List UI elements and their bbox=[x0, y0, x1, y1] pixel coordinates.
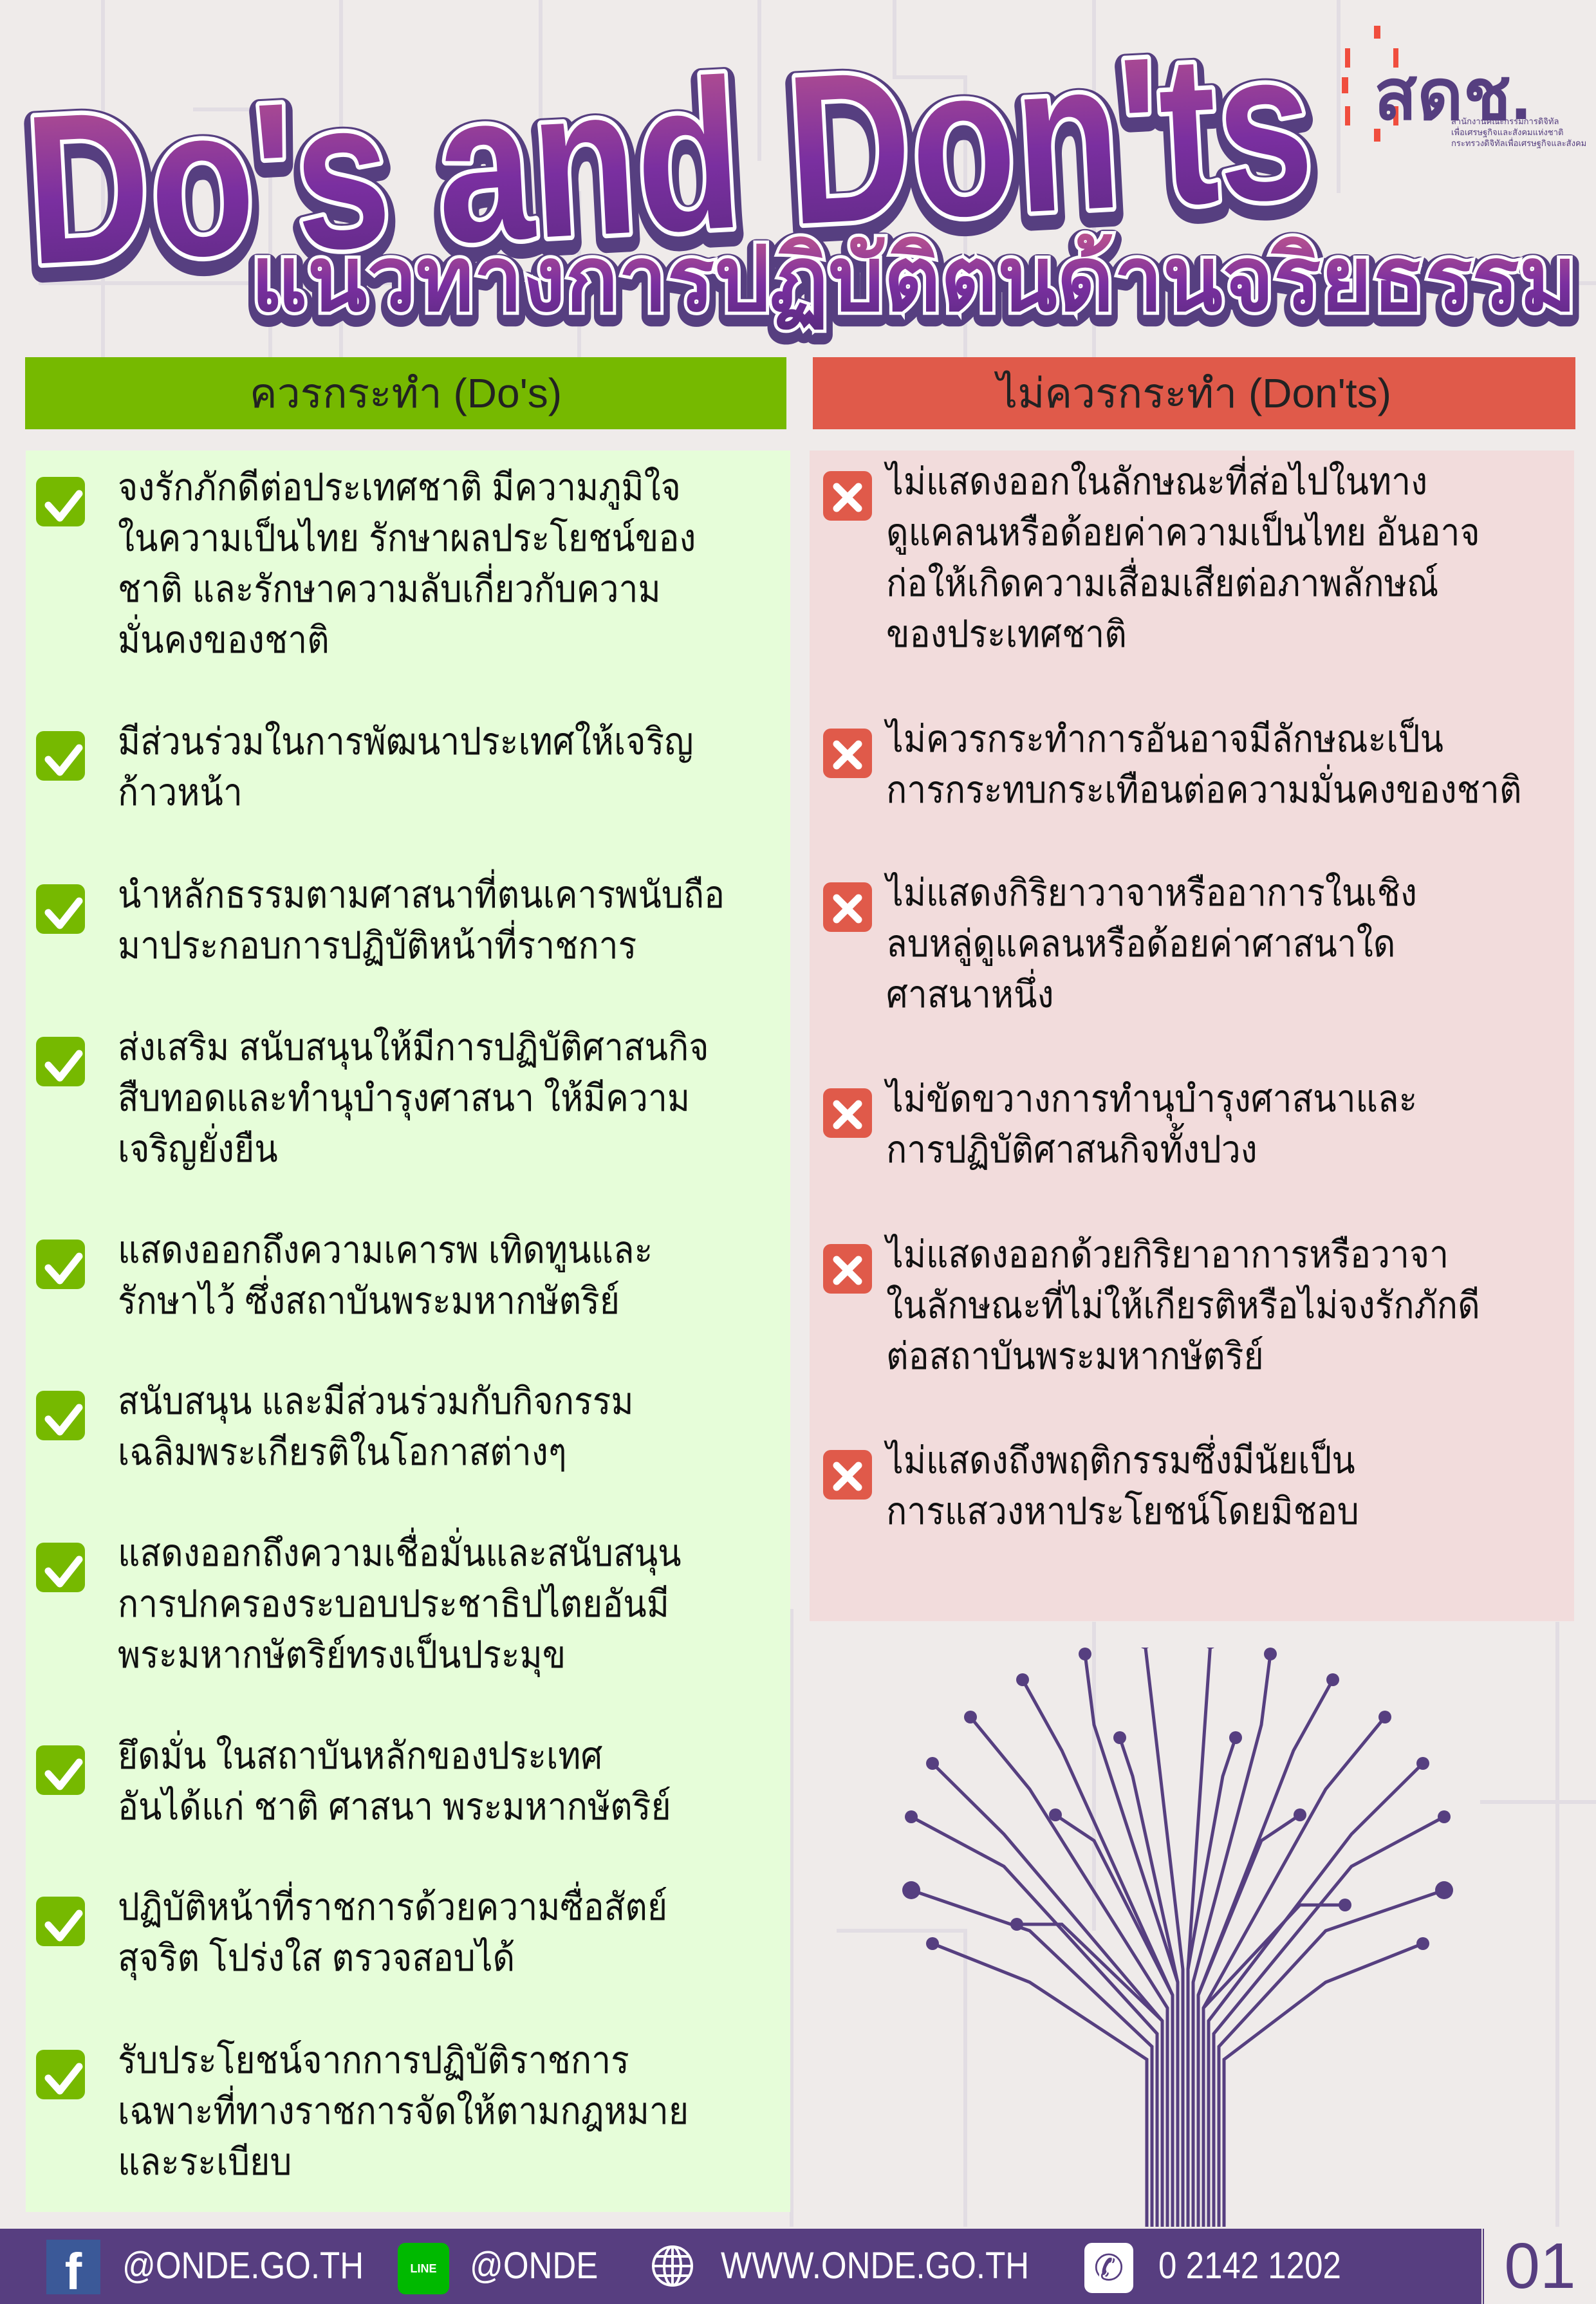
do item 5 bbox=[36, 1229, 653, 1322]
do item 6: เฉลิมพระเกียรติในโอกาสต่างๆ bbox=[118, 1431, 566, 1473]
do item 7: พระมหากษัตริย์ทรงเป็นประมุข bbox=[118, 1634, 566, 1676]
do item 10: รับประโยชน์จากการปฏิบัติราชการ bbox=[118, 2039, 629, 2081]
do item 4: เจริญยั่งยืน bbox=[118, 1128, 278, 1170]
do item 1: จงรักภักดีต่อประเทศชาติ มีความภูมิใจ bbox=[118, 467, 681, 508]
page number bbox=[1480, 2229, 1596, 2304]
dont item 6 bbox=[823, 1435, 1359, 1532]
header: don'ts: ไม่ควรกระทำ (Don'ts) bbox=[997, 370, 1391, 416]
do item 3: นำหลักธรรมตามศาสนาที่ตนเคารพนับถือ bbox=[118, 874, 725, 916]
do item 1: มั่นคงของชาติ bbox=[118, 619, 329, 661]
text: facebook: @ONDE.GO.TH bbox=[122, 2245, 364, 2287]
dont item 5 bbox=[823, 1234, 1480, 1377]
dont item 5: ในลักษณะที่ไม่ให้เกียรติหรือไม่จงรักภักดี bbox=[886, 1285, 1480, 1326]
footer bar bbox=[0, 2229, 1596, 2304]
header: don'ts bbox=[813, 357, 1575, 429]
do item 7 bbox=[36, 1528, 682, 1677]
dont item 3: ศาสนาหนึ่ง bbox=[886, 974, 1054, 1016]
do item 2 bbox=[36, 721, 694, 813]
dont item 1 bbox=[823, 456, 1480, 655]
do item 10: เฉพาะที่ทางราชการจัดให้ตามกฎหมาย bbox=[118, 2090, 689, 2132]
panel: do's list bbox=[26, 451, 790, 2212]
logo: กระทรวงดิจิทัลเพื่อเศรษฐกิจและสังคม bbox=[1451, 138, 1586, 148]
do item 3: มาประกอบการปฏิบัติหน้าที่ราชการ bbox=[118, 925, 636, 967]
icon: line: LINE bbox=[410, 2262, 436, 2275]
do item 9: ปฏิบัติหน้าที่ราชการด้วยความซื่อสัตย์ bbox=[118, 1886, 667, 1928]
text: website: WWW.ONDE.GO.TH bbox=[721, 2245, 1029, 2287]
do item 2: ก้าวหน้า bbox=[118, 772, 243, 813]
dont item 5: ไม่แสดงออกด้วยกิริยาอาการหรือวาจา bbox=[886, 1234, 1449, 1276]
do item 1: ในความเป็นไทย รักษาผลประโยชน์ของ bbox=[118, 517, 696, 559]
do item 8: อันได้แก่ ชาติ ศาสนา พระมหากษัตริย์ bbox=[118, 1786, 671, 1828]
dont item 3: ลบหลู่ดูแคลนหรือด้อยค่าศาสนาใด bbox=[886, 923, 1395, 965]
dont item 1: ก่อให้เกิดความเสื่อมเสียต่อภาพลักษณ์ bbox=[886, 562, 1438, 604]
do item 10: และระเบียบ bbox=[118, 2141, 292, 2183]
do item 10 bbox=[36, 2039, 689, 2183]
do item 2: มีส่วนร่วมในการพัฒนาประเทศให้เจริญ bbox=[118, 721, 694, 763]
dont item 1: ดูแคลนหรือด้อยค่าความเป็นไทย อันอาจ bbox=[886, 512, 1480, 553]
subtitle thai: แนวทางการปฏิบัติตนด้านจริยธรรม bbox=[251, 228, 1577, 330]
do item 4 bbox=[36, 1027, 709, 1170]
logo: สดช. bbox=[1374, 55, 1531, 135]
icon: globe bbox=[652, 2245, 693, 2287]
dont item 4 bbox=[823, 1078, 1417, 1171]
do item 8: ยึดมั่น ในสถาบันหลักของประเทศ bbox=[118, 1735, 602, 1777]
do item 5: รักษาไว้ ซึ่งสถาบันพระมหากษัตริย์ bbox=[118, 1280, 620, 1322]
dont item 2 bbox=[823, 717, 1521, 811]
dont item 1: ของประเทศชาติ bbox=[886, 613, 1127, 655]
dont item 6: ไม่แสดงถึงพฤติกรรมซึ่งมีนัยเป็น bbox=[886, 1440, 1355, 1482]
page number: 01 bbox=[1504, 2230, 1576, 2302]
dont item 3 bbox=[823, 872, 1417, 1016]
do item 6: สนับสนุน และมีส่วนร่วมกับกิจกรรม bbox=[118, 1380, 634, 1422]
dont item 1: ไม่แสดงออกในลักษณะที่ส่อไปในทาง bbox=[886, 461, 1427, 503]
subtitle thai: แนวทางการปฏิบัติตนด้านจริยธรรม bbox=[251, 234, 1577, 335]
illustration: circuit tree bbox=[902, 1648, 1453, 2227]
icon: line bbox=[398, 2243, 449, 2294]
dont item 2: ไม่ควรกระทำการอันอาจมีลักษณะเป็น bbox=[886, 718, 1443, 760]
header: do's: ควรกระทำ (Do's) bbox=[250, 370, 562, 416]
do item 5: แสดงออกถึงความเคารพ เทิดทูนและ bbox=[118, 1229, 653, 1271]
do item 4: สืบทอดและทำนุบำรุงศาสนา ให้มีความ bbox=[118, 1077, 690, 1119]
icon: phone bbox=[1084, 2243, 1133, 2293]
do item 3 bbox=[36, 869, 725, 967]
text: phone: 0 2142 1202 bbox=[1158, 2245, 1341, 2287]
do item 1: ชาติ และรักษาความลับเกี่ยวกับความ bbox=[118, 568, 661, 610]
header: do's bbox=[25, 357, 786, 429]
do item 7: แสดงออกถึงความเชื่อมั่นและสนับสนุน bbox=[118, 1532, 682, 1574]
do item 7: การปกครองระบอบประชาธิปไตยอันมี bbox=[118, 1583, 669, 1625]
logo bbox=[1342, 26, 1586, 148]
logo: เพื่อเศรษฐกิจและสังคมแห่งชาติ bbox=[1451, 127, 1563, 137]
do item 6 bbox=[36, 1380, 634, 1473]
title bbox=[20, 5, 1579, 345]
do item 9: สุจริต โปร่งใส ตรวจสอบได้ bbox=[118, 1937, 515, 1979]
do item 8 bbox=[36, 1730, 671, 1828]
logo: สำนักงานคณะกรรมการดิจิทัล bbox=[1451, 116, 1559, 126]
dont item 4: การปฏิบัติศาสนกิจทั้งปวง bbox=[886, 1129, 1257, 1171]
icon: phone: ✆ bbox=[1094, 2247, 1124, 2288]
dont item 6: การแสวงหาประโยชน์โดยมิชอบ bbox=[886, 1491, 1359, 1532]
dont item 5: ต่อสถาบันพระมหากษัตริย์ bbox=[886, 1335, 1264, 1377]
panel: don'ts list bbox=[810, 451, 1574, 1621]
icon: facebook bbox=[46, 2240, 100, 2294]
do item 4: ส่งเสริม สนับสนุนให้มีการปฏิบัติศาสนกิจ bbox=[118, 1027, 709, 1068]
do item 9 bbox=[36, 1882, 667, 1980]
subtitle thai: แนวทางการปฏิบัติตนด้านจริยธรรม bbox=[251, 228, 1577, 330]
do item 1 bbox=[36, 467, 696, 661]
icon: facebook: f bbox=[65, 2243, 82, 2300]
dont item 2: การกระทบกระเทือนต่อความมั่นคงของชาติ bbox=[886, 769, 1521, 811]
dont item 4: ไม่ขัดขวางการทำนุบำรุงศาสนาและ bbox=[886, 1078, 1417, 1120]
dont item 3: ไม่แสดงกิริยาวาจาหรืออาการในเชิง bbox=[886, 872, 1417, 914]
text: line: @ONDE bbox=[470, 2245, 598, 2287]
